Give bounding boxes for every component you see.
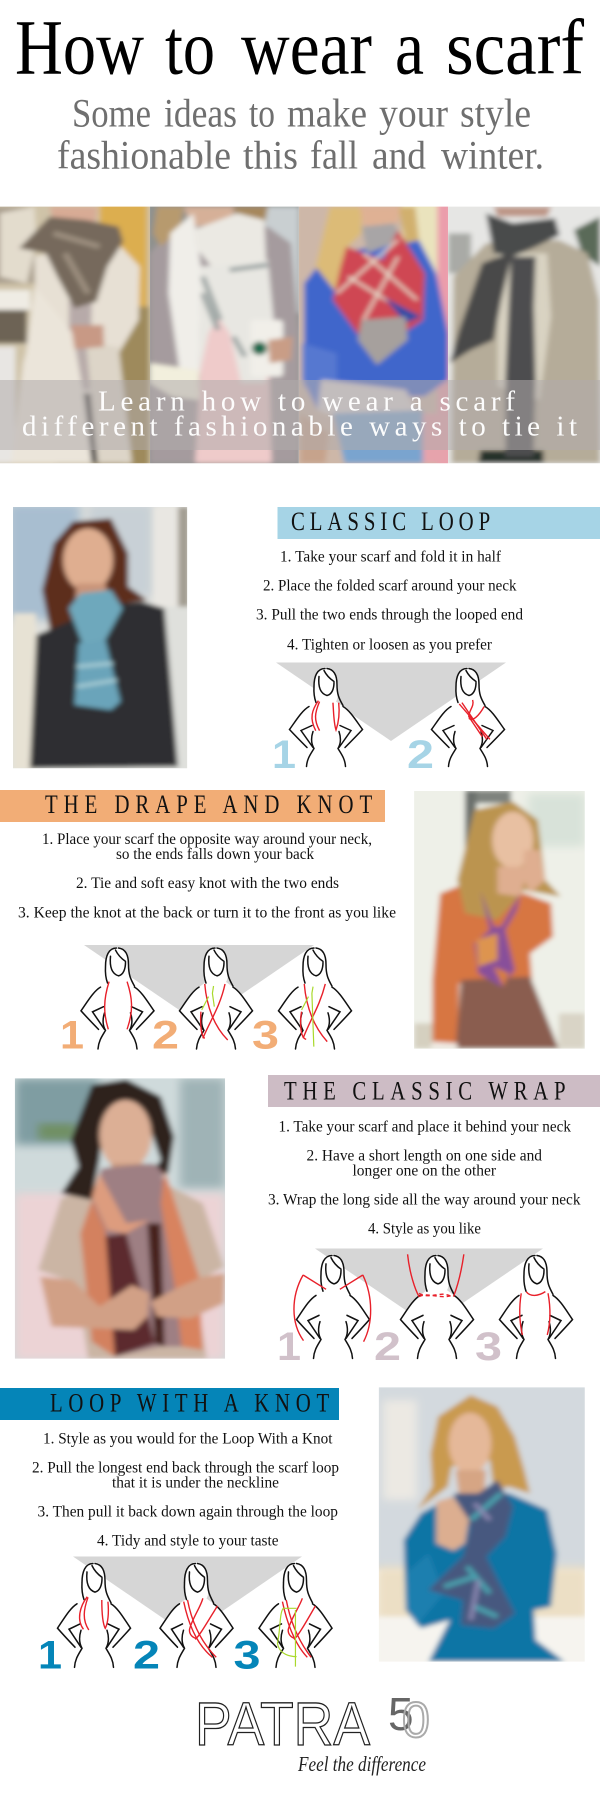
subtitle: fashionable: [57, 132, 231, 178]
logo: Patra 50 years, Feel the difference: [195, 1688, 430, 1776]
caption text: [22, 386, 577, 442]
photo: woman in blue sweater with patterned scarf: [375, 1383, 589, 1667]
title: [15, 4, 584, 90]
title: How: [15, 4, 144, 90]
banner heading: the classic wrap: THE CLASSIC WRAP: [284, 1077, 566, 1106]
caption text: different fashionable ways to tie it: [22, 410, 577, 442]
subtitle: make: [287, 90, 367, 136]
diagram: classic loop steps: 1: [272, 733, 296, 777]
instructions: the drape and knot: so the ends falls down your back: [116, 846, 314, 863]
instructions: the drape and knot: [18, 831, 396, 922]
diagram: loop with a knot steps: 3: [234, 1634, 260, 1678]
diagram: classic loop steps: [272, 662, 506, 777]
subtitle: and: [372, 132, 426, 178]
diagram: loop with a knot steps: 2: [133, 1634, 160, 1678]
banner heading: classic loop: [278, 507, 600, 539]
instructions: the classic wrap: 1. Take your scarf and place it behind your neck: [278, 1118, 571, 1136]
logo: 50 anniversary mark: 5: [388, 1688, 414, 1740]
instructions: classic loop: 4. Tighten or loosen as you prefer: [287, 636, 493, 654]
instructions: loop with a knot: [32, 1430, 339, 1550]
photo: red plaid blanket scarf, blue jacket: [295, 200, 453, 470]
banner heading: classic loop: CLASSIC LOOP: [291, 508, 490, 537]
subtitle: to: [249, 90, 275, 136]
panel: loop with a knot: [0, 1383, 589, 1678]
photo: woman in orange shirt with purple scarf: [409, 787, 589, 1053]
diagram: classic wrap steps: 3: [475, 1325, 502, 1369]
photo: woman with blue plaid scarf: [8, 503, 191, 773]
diagram: drape and knot steps: 3: [252, 1014, 279, 1058]
banner heading: loop with a knot: LOOP WITH A KNOT: [50, 1389, 329, 1418]
instructions: loop with a knot: 1. Style as you would for the Loop With a Knot: [43, 1430, 333, 1448]
panel: the classic wrap: [10, 1075, 600, 1369]
instructions: the classic wrap: [268, 1118, 580, 1238]
instructions: classic loop: 2. Place the folded scarf around your neck: [263, 578, 516, 594]
photo: taupe scarf over cream cardigan: [0, 200, 157, 470]
instructions: the drape and knot: 3. Keep the knot at the back or turn it to the front as you like: [18, 904, 396, 922]
subtitle: winter.: [441, 132, 544, 178]
instructions: the classic wrap: 3. Wrap the long side all the way around your neck: [268, 1192, 580, 1208]
instructions: loop with a knot: that it is under the neckline: [112, 1474, 279, 1492]
logo: 50 anniversary mark: 0: [402, 1692, 430, 1748]
subtitle: fall: [310, 132, 358, 178]
panel: classic loop: [8, 503, 600, 777]
instructions: the classic wrap: 4. Style as you like: [368, 1220, 481, 1238]
subtitle: your: [379, 90, 448, 136]
title: a: [395, 4, 424, 90]
title: to: [165, 4, 215, 90]
photo strip: four scarf looks with caption: [0, 200, 600, 470]
photo: white striped scarf with coffee cup: [145, 200, 302, 470]
instructions: loop with a knot: 4. Tidy and style to your taste: [97, 1532, 278, 1550]
instructions: classic loop: 3. Pull the two ends through the looped end: [256, 606, 523, 624]
title: wear: [241, 4, 372, 90]
diagram: drape and knot steps: [60, 945, 352, 1058]
diagram: classic wrap steps: 1: [277, 1325, 301, 1369]
caption band: [0, 380, 600, 450]
diagram: drape and knot steps: 2: [152, 1014, 179, 1058]
instructions: the classic wrap: longer one on the other: [352, 1162, 497, 1180]
instructions: loop with a knot: 3. Then pull it back down again through the loop: [38, 1504, 338, 1520]
logo wordmark: PATRA: [195, 1690, 370, 1758]
subtitle: ideas: [164, 90, 237, 136]
instructions: loop with a knot: 2. Pull the longest end back through the scarf loop: [32, 1460, 339, 1476]
diagram: loop with a knot steps: [38, 1556, 332, 1678]
title: scarf: [446, 4, 584, 90]
logo: 50 anniversary mark: [388, 1688, 430, 1748]
diagram: classic loop steps: 2: [407, 733, 434, 777]
diagram: classic wrap steps: [277, 1248, 572, 1369]
instructions: the drape and knot: 2. Tie and soft easy knot with the two ends: [76, 875, 339, 892]
diagram: classic wrap steps: 2: [374, 1325, 401, 1369]
diagram: drape and knot steps: 1: [60, 1014, 84, 1058]
diagram: loop with a knot steps: 1: [38, 1634, 62, 1678]
instructions: the classic wrap: 2. Have a short length on one side and: [306, 1148, 542, 1164]
panel: the drape and knot: [0, 787, 589, 1058]
subtitle: style: [460, 90, 531, 136]
instructions: classic loop: 1. Take your scarf and fold it in half: [280, 548, 502, 566]
subtitle: [57, 90, 544, 178]
instructions: classic loop: [256, 548, 523, 654]
photo: charcoal scarf, beige cardigan: [444, 200, 600, 470]
photo: woman with striped rust scarf: [10, 1075, 230, 1362]
banner heading: the drape and knot: THE DRAPE AND KNOT: [45, 791, 372, 820]
caption text: Learn how to wear a scarf: [98, 386, 515, 418]
logo tagline: Feel the difference: [297, 1752, 426, 1776]
subtitle: this: [243, 132, 298, 178]
instructions: the drape and knot: 1. Place your scarf the opposite way around your neck,: [42, 831, 372, 848]
subtitle: Some: [72, 90, 151, 136]
